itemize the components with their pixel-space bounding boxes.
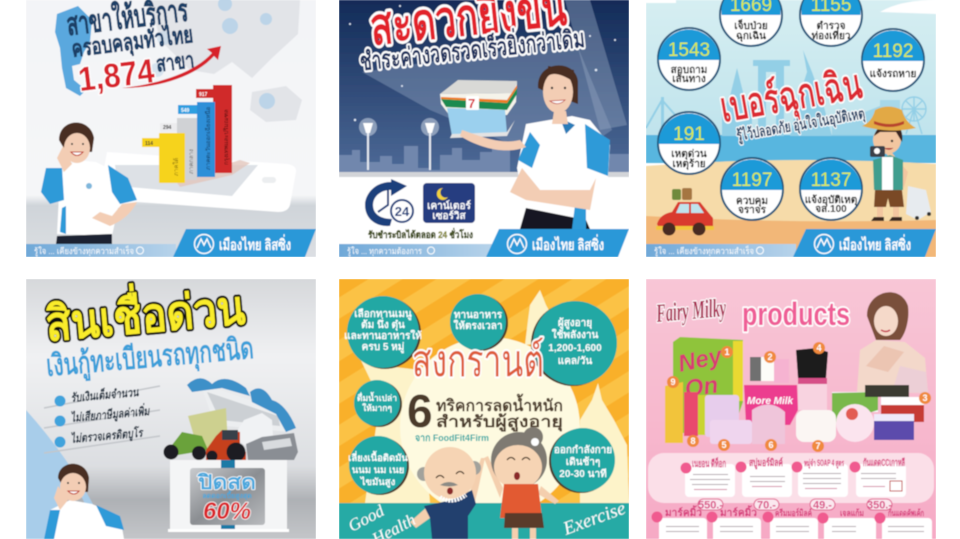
stars [349,5,616,131]
card 3 [792,458,848,497]
card 2: สบู่มอร์มิลค์ [749,457,783,470]
number circle: 1543: สอบถาม [671,65,707,76]
subtitle [436,393,563,433]
card 5: มาร์คมิ้ว [665,505,702,519]
bullet: no credit bureau check: ไม่ตรวจเครดิตบูโร [70,425,145,447]
brand badge: เมืองไทย ลิสซิ่ง [839,234,911,254]
number circle: 1543: 1543 [668,40,710,61]
panel: 7-Eleven payment [339,0,629,257]
cream temple silhouettes [356,290,629,503]
subtitle: ทริคการลดน้ำหนัก [436,393,563,415]
product: pink More Milk box: More Milk [747,396,794,407]
panel: vehicle title loan [26,272,316,539]
7-Eleven store [440,80,517,138]
counter service badge: เซอร์วิส [432,210,467,222]
product: pink More Milk box [744,385,798,425]
number circle: 1197: จราจร [738,205,767,216]
headline [40,272,255,385]
bar: blue: ภาคตะวันออกเฉียงเหนือ [204,107,212,170]
clouds [646,0,936,14]
script: good health [345,501,419,539]
tip bubble: calories: ใช้พลังงาน [552,328,598,341]
white van [233,413,273,446]
product number markers: 9 [670,377,676,387]
metal plate with discount [190,468,265,525]
number circle: 1197: 1197 [732,170,772,191]
tip bubble: drink water: ให้มากๆ [362,403,392,413]
card 6 [706,505,761,539]
tip bubble: choose menu [344,296,422,369]
gift box with vehicles [164,378,298,532]
product number markers: 8 [690,436,696,446]
presenter [44,464,124,539]
tip bubble: exercise [549,428,615,493]
ribbon bows [187,378,250,396]
headline: สาขา [155,47,195,77]
bar chart: branches by region [142,85,250,187]
headline [64,0,199,100]
tip bubble: drink water [354,380,402,427]
bar: gray: ภาคกลาง [189,149,195,174]
product number markers: 7 [815,441,821,451]
silver SUV [246,433,298,460]
tip bubble: exercise: เดินช้าๆ [566,456,600,468]
tip bubble: calories: ผู้สูงอายุ [558,317,592,330]
heading: products: products [742,296,850,332]
product: soap bars [750,357,789,383]
product: Ney On box: Ney [676,342,726,378]
product: pump bottle [796,348,828,410]
card 5 [652,505,707,539]
counter service badge [423,183,475,223]
card 8 [818,508,876,539]
tip bubble: choose menu: ต้ม นึ่ง ตุ๋น [361,317,405,331]
headline: emergency [719,67,868,146]
red growth arrow [122,46,221,88]
panel: Fairy Milky products [646,279,936,539]
product number markers: 5 [721,440,727,450]
tip bubble: avoid fat: นนม นม เนย [352,465,404,476]
card 7 [762,507,818,539]
tagline strip: รู้ใจ ... ทุกความต้องการ [347,246,422,257]
product: orange sachet [665,382,710,443]
tip bubble: avoid fat: เลี่ยงเนื้อติดมัน [348,450,408,464]
metal plate with discount: ปิดสด [197,472,256,494]
elderly woman [484,427,559,539]
tip bubble: calories: แคล/วัน [558,355,592,367]
tip bubble: exercise: ออกกำลังกาย [554,444,612,456]
number circle: 1192 [862,29,924,91]
panel: Songkran weight-loss tips [339,279,629,539]
product number markers: 6 [768,440,774,450]
tip bubble: eat on time [450,294,508,351]
document [188,408,228,450]
number circle: 1669: เจ็บป่วย [734,18,768,32]
number circle: 1137: 1137 [811,170,851,191]
product: Ney On box [673,337,743,433]
teal ground [339,503,629,539]
product info cards, first row [648,453,934,503]
number circle: 1155: ท่องเที่ยว [812,28,851,42]
tourist with camera and suitcase [862,106,931,221]
map location pins [150,0,275,109]
bar: yellow [142,133,185,183]
headline: emergency: เบอร์ฉุกเฉิน [717,61,866,134]
box lid [200,383,290,432]
product: soap boxes [832,385,924,440]
tip bubble: eat on time: ให้ตรงเวลา [454,319,502,332]
number circle: 1543 [658,28,720,90]
brand badge [173,229,316,257]
ground and white lower area [339,172,629,177]
card 1 [680,456,735,497]
script: good health: Good [345,501,388,536]
brand badge: เมืองไทย ลิสซิ่ง [532,234,604,254]
tagline strip: รู้ใจ ... เคียงข้างทุกความสำเร็จ [34,245,134,257]
script: exercise: Exercise [560,498,629,539]
price tags [698,499,892,512]
counter service badge: เคาน์เตอร์ [427,200,472,212]
headline: สินเชื่อด่วน [43,273,247,352]
brand badge [486,229,629,257]
card 6: มาร์คมิ้ว [720,505,757,519]
caption: pay 24 hours: รับชำระบิลได้ตลอด 24 ชั่วโมง [368,227,473,241]
Thailand map [55,6,92,96]
tip bubble: drink water: ดื่มน้ำเปล่า [357,391,397,403]
24-hour clock icon [365,179,413,226]
brand logo: Fairy Milky [654,293,727,328]
big number 6: 6 [407,385,433,437]
bar: gray [160,118,197,180]
large cream circle [400,337,580,517]
city skyline [339,146,629,172]
number circle: 1669: ฉุกเฉิน [736,30,766,42]
source: จาก FoodFit4Firm [415,433,489,444]
number circle: 1669 [720,0,782,46]
tip bubble: calories: 1,200-1,600 [548,343,602,354]
panel: emergency numbers [646,0,936,257]
number circle: 1155: ตำรวจ [817,20,846,32]
number circle: 191: เหตุร้าย [672,158,706,170]
headline: เงินกู้ทะเบียนรถทุกชนิด [45,332,255,385]
number circle: 1137 [800,158,862,220]
price: 70: 70.- [757,500,776,512]
number circle: 1197: ควบคุม [736,196,768,207]
tagline strip [646,244,796,257]
brand badge: เมืองไทย ลิสซิ่ง [219,234,291,254]
product number markers: 3 [922,393,928,403]
blue drape [26,410,110,539]
card 9: กันแดดคัพเค้ก [888,508,924,518]
headline: ชำระค่างวดรวดเร็วยิ่งกว่าเดิม [358,21,586,76]
tip bubble: exercise: 20-30 นาที [559,468,607,480]
number circle: 1137: แจ้งอุบัติเหตุ [805,194,857,206]
number circle: 1155 [800,0,862,46]
metal plate with discount: 60% [203,498,251,525]
price: 49: 49.- [813,500,832,512]
tip bubble: avoid fat: ไขมันสูง [360,476,396,489]
bar: blue: 549 [181,108,190,114]
headline: ครอบคลุมทั่วไทย [70,17,195,64]
card 9 [874,508,932,539]
number circle: 191: 191 [673,124,705,145]
price: 550: 550.- [698,500,723,512]
street lamps [359,118,439,170]
product number markers: 4 [816,343,822,353]
7-Eleven store: 7 [468,96,475,111]
tractor [206,430,246,462]
red car with luggage [656,188,714,236]
tagline strip: รู้ใจ ... เคียงข้างทุกความสำเร็จ [654,245,754,257]
number circle: 1137: จส.100 [815,204,847,215]
elderly man [410,447,485,539]
card 8: เจลแก้ม [840,508,864,518]
bullet: no extra insurance: ไม่เสียภาษีมูลค่าเพิ่ม [70,402,151,426]
model [857,292,928,393]
number circle: 1543: เส้นทาง [672,73,706,85]
product info cards, second row [652,505,932,539]
number circle: 191 [658,112,720,174]
world map [150,0,302,122]
bar: red: 917 [199,92,208,98]
card 3: หมู่จ๋า SOAP 4 สูตร [804,458,844,469]
Thai landmarks silhouette [646,50,900,136]
spotlight beams [362,44,612,142]
bar: gray: 294 [163,125,172,131]
headline: 1,874 [76,52,156,99]
headline: emergency: รู้ไว้ปลอดภัย อุ่นใจในอุบัติเหตุ [735,103,866,146]
card 7: ครีมมอร์มิลค์ [775,507,812,518]
bar: blue [178,102,215,177]
bullet list [44,384,160,453]
tagline strip [26,244,176,257]
bullet: receive full amount: รับเงินเต็มจำนวน [70,384,140,405]
subtitle: สำหรับผู้สูงอายุ [436,413,563,433]
24-hour clock icon: 24 [395,204,410,219]
woman presenting [460,65,610,229]
bar: red [196,85,232,173]
bar: yellow: ภาคใต้ [172,158,180,176]
ferris wheel [902,97,926,134]
brand badge [793,229,936,257]
motorcycle [164,432,208,460]
number circle: 191: เหตุด่วน [671,148,707,160]
number circle: 1197 [721,158,783,220]
panel: branches across Thailand [26,0,316,257]
product number markers: 1 [724,347,730,357]
metal plate with discount: ลดดอกเบี้ยสูงสุด [202,489,252,501]
tip bubble: choose menu: และทานอาหารให้ [344,329,422,342]
tip bubble: avoid fat [348,436,409,495]
price: 350: 350.- [867,500,892,512]
product: Ney On box: On [683,372,720,403]
card 1: เนยอน ดีท็อก [692,456,726,470]
card 2 [736,457,792,497]
tip bubble: choose menu: เลือกทานเมนู [354,308,412,321]
tagline strip [339,244,494,257]
tip bubble: choose menu: ครบ 5 หมู่ [362,341,404,354]
product number markers: 2 [767,352,773,362]
presenter with hand to mouth [41,122,137,244]
number circle: 1192: 1192 [873,41,913,62]
headline [352,0,586,76]
bar: red: กรุงเทพและปริมณฑล [223,109,230,165]
bar: yellow: 114 [145,141,153,147]
tablet [100,152,296,212]
product number markers [667,342,931,452]
tip bubble: calories [531,301,617,386]
box [170,460,287,530]
card 4 [850,457,906,497]
product: cream jars and masks [705,395,874,444]
title: Songkran: สงกรานต์ [412,337,544,386]
tip bubble: eat on time: ทานอาหาร [454,310,503,321]
number circle: 1192: แจ้งรถหาย [870,68,916,80]
card 4: กันแดดCCเกาหลี [863,457,905,469]
